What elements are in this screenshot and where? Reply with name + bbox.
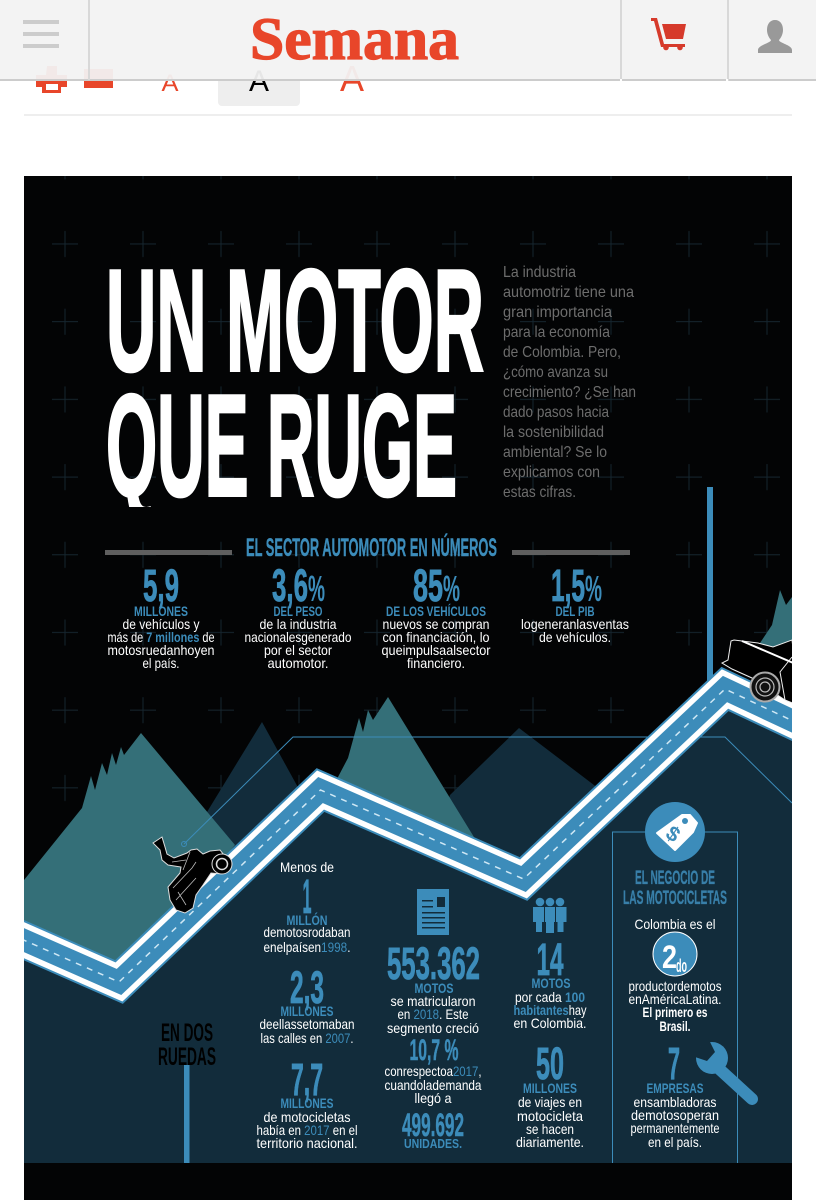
column: motos per inhabitant: MOTOS: [532, 975, 570, 991]
column: historic numbers: MILLONES: [280, 1003, 334, 1019]
stat: 1,5%: logeneranlasventas: [521, 616, 629, 632]
intro text: explicamos con: [503, 464, 600, 481]
font size selected button: [218, 60, 300, 106]
rider and scooter silhouette: [153, 837, 232, 913]
column: registrations: 553.362: [387, 938, 480, 989]
vertical bar bottom: [184, 1065, 190, 1163]
icon: wrench: [692, 1038, 752, 1099]
dark ground below road: [10, 689, 810, 1163]
intro text: la sostenibilidad: [503, 424, 604, 441]
column: registrations: en 2018. Este: [398, 1006, 469, 1022]
column: registrations: UNIDADES.: [404, 1137, 462, 1151]
badge: 2do: do: [676, 956, 687, 976]
font size medium: A: [249, 65, 269, 98]
column: motos per inhabitant: 14: [536, 934, 564, 985]
panel: motorcycle business: ensambladoras: [634, 1094, 716, 1110]
stat: 3,6%: %: [308, 568, 325, 609]
column: registrations: [384, 938, 482, 1151]
intro text: crecimiento? ¿Se han: [503, 384, 636, 401]
section heading: [105, 533, 630, 556]
stat: 85%: DE LOS VEHÍCULOS: [386, 603, 486, 619]
heading: en dos ruedas: EN DOS: [161, 1019, 213, 1047]
article toolbar: [24, 58, 792, 116]
panel: motorcycle business: demotosoperan: [631, 1107, 719, 1123]
intro text: gran importancia: [503, 304, 612, 321]
roof highlight: [742, 640, 792, 664]
stat: 3,6%: por el sector: [264, 642, 332, 658]
column: historic numbers: deellassetomaban: [260, 1016, 354, 1032]
column: historic numbers: 7,7: [291, 1054, 323, 1105]
column: motos per inhabitant: MILLONES: [523, 1080, 577, 1096]
section heading: EL SECTOR AUTOMOTOR EN NÚMEROS: [246, 532, 497, 562]
panel: motorcycle business: permanentemente: [630, 1120, 720, 1136]
stat: 5,9 millones: de vehículos y: [122, 616, 200, 632]
stat: 85%: 85: [413, 560, 443, 611]
box outline: [612, 832, 738, 1172]
icon: menu: [23, 20, 59, 48]
column: historic numbers: demotosrodaban: [264, 924, 350, 940]
stat: 5,9 millones: MILLONES: [134, 603, 188, 619]
scooter detail lines: [172, 852, 196, 905]
intro text: La industria: [503, 264, 576, 281]
badge: 2do: [653, 932, 697, 976]
stat: 85%: financiero.: [407, 655, 465, 671]
bottom band: [24, 1163, 792, 1200]
intro text: de Colombia. Pero,: [503, 344, 621, 361]
car body: [721, 640, 792, 704]
heading: en dos ruedas: RUEDAS: [158, 1043, 216, 1071]
stat: 3,6%: de la industria: [260, 616, 337, 632]
stat: 3,6%: 3,6: [272, 560, 308, 611]
stat: 5,9 millones: motosruedanhoyen: [108, 642, 214, 658]
intro text: dado pasos hacia: [503, 404, 609, 421]
stat: 1,5%: [522, 569, 628, 642]
stat: 85%: con financiación, lo: [382, 629, 490, 645]
font size small: A: [162, 70, 178, 97]
dark mountain right: [450, 728, 595, 857]
vertical bar top: [707, 487, 713, 682]
column: registrations: segmento creció: [387, 1020, 479, 1036]
car wheel: [750, 672, 780, 702]
stat: 3,6%: [245, 568, 351, 668]
panel: motorcycle business: El primero es: [642, 1004, 708, 1020]
column: historic numbers: había en 2017 en el: [256, 1122, 358, 1138]
icon: cart: [651, 18, 686, 50]
column: motos per inhabitant: [514, 934, 586, 1150]
panel: motorcycle business: productordemotos: [628, 978, 722, 994]
panel background: [24, 176, 792, 880]
icon: price tag: $: [661, 822, 684, 847]
dark mountain left: [207, 722, 298, 849]
stat: 3,6%: nacionalesgenerado: [244, 629, 352, 645]
heading: EL NEGOCIO DE: [635, 868, 715, 889]
column: historic numbers: [256, 859, 358, 1151]
intro text: ambiental? Se lo: [503, 444, 607, 461]
column: historic numbers: las calles en 2007.: [260, 1030, 354, 1046]
panel: motorcycle business: Colombia es el: [634, 916, 716, 932]
column: historic numbers: 2,3: [290, 962, 324, 1013]
connector line: [184, 737, 792, 844]
stat: 85%: %: [443, 568, 460, 609]
stat: 5,9 millones: más de 7 millones de: [108, 629, 215, 645]
stat: 85%: nuevos se compran: [382, 616, 490, 632]
column: historic numbers: MILLÓN: [286, 911, 328, 928]
title: [108, 268, 484, 507]
panel: motorcycle business: en el país.: [648, 1134, 702, 1150]
column: motos per inhabitant: en Colombia.: [514, 1015, 586, 1031]
column: registrations: MOTOS: [414, 980, 454, 996]
panel: motorcycle business: enAméricaLatina.: [628, 991, 722, 1007]
icon: motorcycle rider: [153, 837, 232, 913]
intro text: para la economía: [503, 324, 610, 341]
intro text: automotriz tiene una: [503, 284, 634, 301]
road: [10, 689, 810, 982]
column: motos per inhabitant: 50: [536, 1038, 564, 1089]
stat: 5,9 millones: 5,9: [143, 560, 179, 611]
stat: 1,5%: DEL PIB: [556, 603, 594, 619]
column: registrations: conrespectoa2017,: [384, 1063, 481, 1079]
panel: motorcycle business: 7: [668, 1038, 680, 1089]
column: historic numbers: enelpaísen1998.: [264, 939, 350, 955]
column: historic numbers: Menos de: [280, 859, 334, 875]
column: motos per inhabitant: diariamente.: [516, 1134, 584, 1150]
panel: motorcycle business: LAS MOTOCICLETAS: [623, 888, 727, 909]
icon: user: [758, 20, 792, 53]
icon: car: [721, 640, 792, 704]
stat: 1,5%: 1,5: [551, 560, 585, 611]
column: registrations: se matricularon: [390, 993, 476, 1009]
icon: print: [36, 66, 67, 93]
panel: motorcycle business: Brasil.: [660, 1018, 690, 1034]
intro text: [503, 264, 636, 501]
column: registrations: 10,7 %: [410, 1034, 458, 1067]
icon: price tag: [645, 802, 705, 862]
intro text: estas cifras.: [503, 484, 576, 501]
column: registrations: cuandolademanda: [384, 1077, 482, 1093]
stat: 85%: [382, 568, 490, 668]
font size large: A: [340, 58, 364, 99]
panel: motorcycle business: EMPRESAS: [646, 1080, 704, 1096]
stat: 3,6%: DEL PESO: [274, 603, 323, 619]
icon: document: [417, 889, 449, 935]
wheel arch line: [780, 657, 792, 700]
teal mountain left: [24, 733, 235, 985]
icon: people: [533, 898, 566, 933]
column: historic numbers: MILLONES: [280, 1095, 334, 1111]
panel: motorcycle business: [612, 802, 752, 1172]
column: motos per inhabitant: motocicleta: [517, 1108, 583, 1124]
column: registrations: llegó a: [414, 1090, 452, 1106]
column: motos per inhabitant: de viajes en: [518, 1094, 582, 1110]
teal mountain center: [338, 697, 477, 842]
badge: 2do: 2: [662, 939, 677, 975]
mountains: [24, 590, 792, 985]
column: registrations: 499.692: [402, 1107, 464, 1143]
column: motos per inhabitant: por cada 100: [515, 989, 585, 1005]
stat: 1,5%: de vehículos.: [539, 629, 611, 645]
stat: 3,6%: automotor.: [268, 655, 328, 671]
column: motos per inhabitant: habitanteshay: [514, 1002, 586, 1018]
heading: en dos ruedas: [158, 1023, 216, 1065]
teal mountain far right: [760, 590, 792, 646]
intro text: ¿cómo avanza su: [503, 364, 608, 381]
icon: mail: [84, 69, 113, 88]
column: historic numbers: de motocicletas: [264, 1109, 350, 1125]
logo: Semana: [250, 6, 459, 72]
front wheel: [212, 854, 232, 874]
stat: 85%: queimpulsaalsector: [382, 642, 491, 658]
column: historic numbers: 1: [302, 871, 312, 924]
column: motos per inhabitant: se hacen: [526, 1121, 574, 1137]
stat: 1,5%: %: [585, 568, 602, 609]
stat: 5,9 millones: [108, 560, 215, 671]
column: historic numbers: territorio nacional.: [256, 1135, 358, 1151]
stat: 5,9 millones: el país.: [142, 655, 180, 671]
top navigation bar: [0, 0, 816, 82]
